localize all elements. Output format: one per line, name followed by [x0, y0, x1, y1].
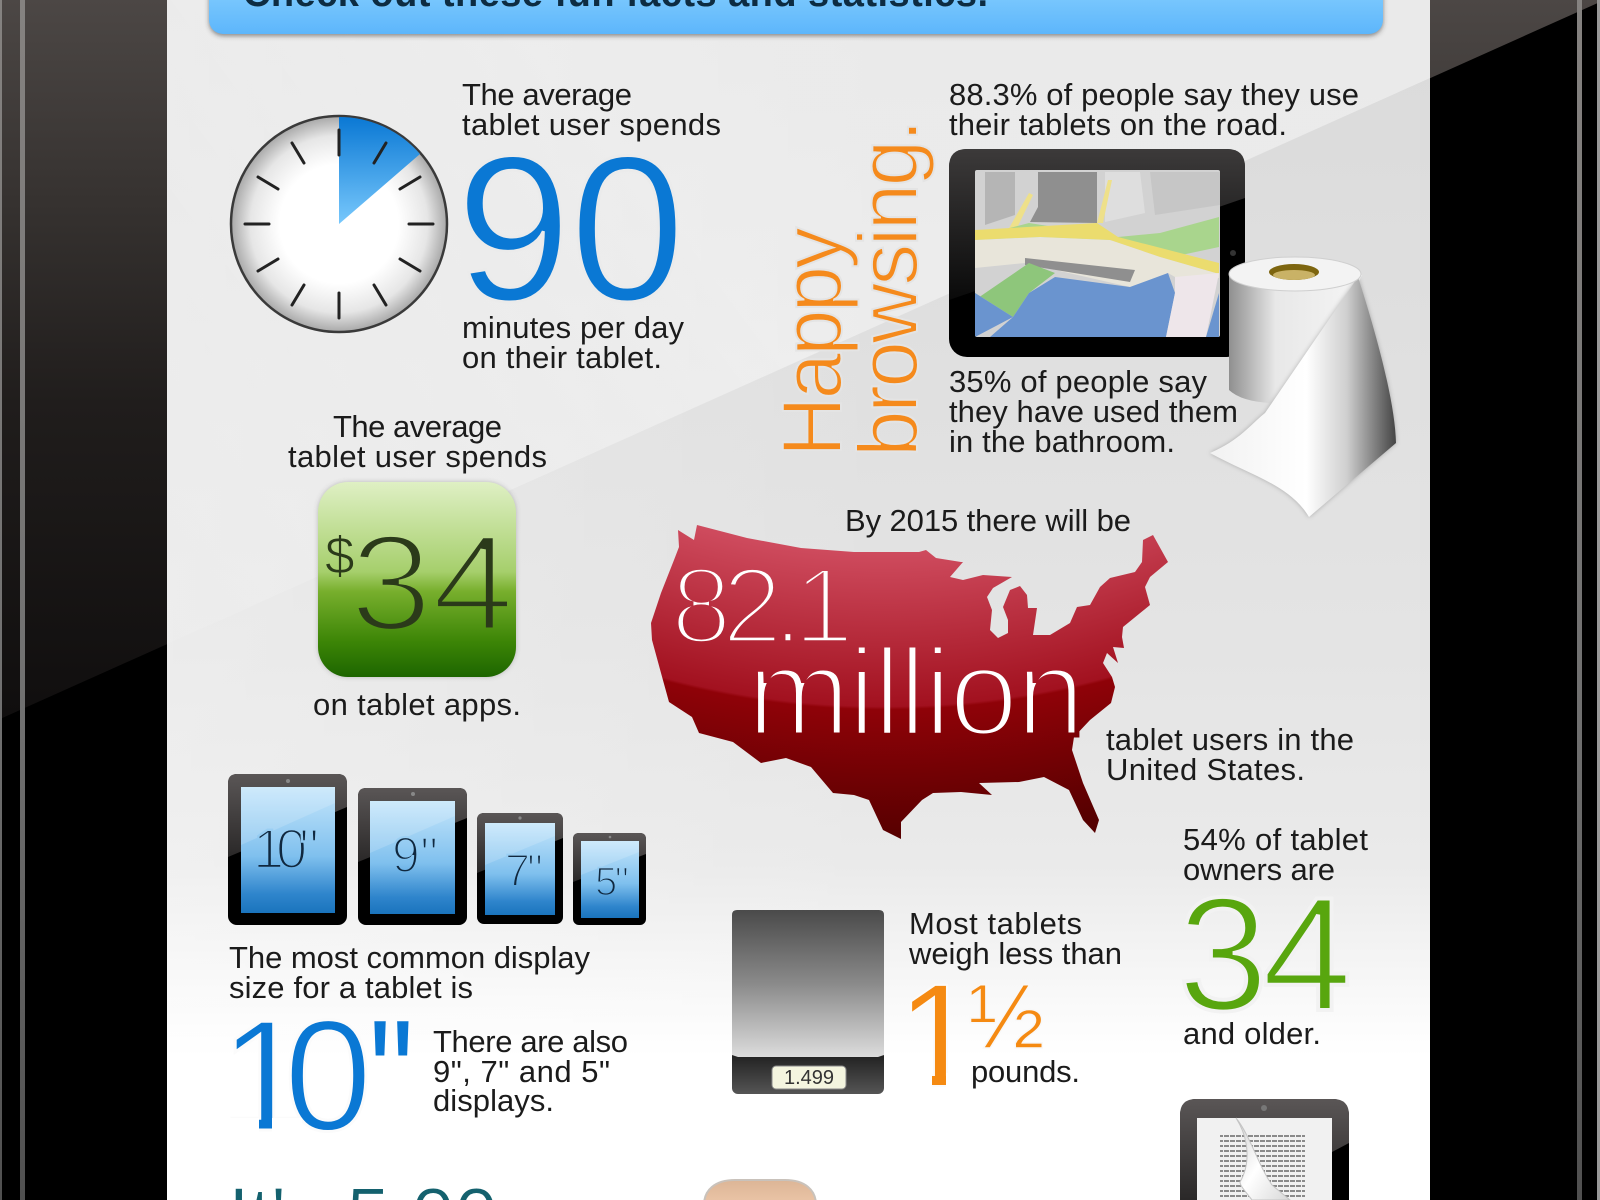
stat: 82.1 million US tablet users: tablet users in the: [1106, 722, 1354, 757]
screen panel background: [167, 0, 1430, 1200]
stat: used in the bathroom: 35% of people say: [949, 364, 1208, 399]
stat: most common display size: ": [369, 988, 414, 1164]
icon: weighing scale: [732, 910, 884, 1094]
stat: 54 percent are 34 and older: and older.: [1183, 1016, 1321, 1051]
tablet 10 inch: 10": [253, 817, 319, 880]
stat: 34 dollars on tablet apps: $: [325, 527, 354, 586]
stat: used in the bathroom: [949, 364, 1238, 459]
tablet 5 inch: [573, 833, 646, 925]
tablet 9 inch: 9": [392, 827, 438, 883]
map of the United States: [651, 525, 1168, 839]
stat: most common display size: displays.: [433, 1083, 554, 1118]
stat: weight under 1 and a half pounds: weigh less than: [908, 936, 1122, 971]
stat: 82.1 million US tablet users: United States.: [1106, 752, 1305, 787]
stat: 90 minutes per day: tablet user spends: [462, 107, 721, 142]
stat: 34 dollars on tablet apps: The average: [333, 409, 502, 444]
vertical heading: Happy browsing: [765, 119, 935, 457]
stat: 34 dollars on tablet apps: [288, 409, 547, 722]
icon: tablet with map: [949, 149, 1245, 357]
heading banner: [209, 0, 1383, 36]
stat: weight under 1 and a half pounds: ½: [968, 966, 1045, 1068]
stat: 82.1 million US tablet users: [651, 503, 1354, 839]
stat: used in the bathroom: in the bathroom.: [949, 424, 1175, 459]
stat: 34 dollars on tablet apps: on tablet apps.: [313, 687, 521, 722]
stat: 82.1 million US tablet users: million: [747, 624, 1085, 762]
stat: 54 percent are 34 and older: 54% of tablet: [1183, 822, 1368, 857]
stat: 90 minutes per day: [456, 77, 721, 375]
vertical heading: Happy browsing: browsing.: [841, 119, 935, 457]
stat: 82.1 million US tablet users: By 2015 there will be: [845, 503, 1131, 538]
stat: used on the road: 88.3% of people say they use: [949, 77, 1359, 112]
icon: toilet paper roll: [1210, 257, 1396, 517]
stat: most common display size: There are also: [433, 1024, 628, 1059]
clock icon: [231, 116, 447, 332]
stat: 54 percent are 34 and older: owners are: [1183, 852, 1335, 887]
icons: tablet display sizes: [228, 774, 646, 925]
icon: weighing scale: 1.499: [784, 1067, 834, 1089]
stat: most common display size: [218, 940, 628, 1164]
stat: weight under 1 and a half pounds: [897, 906, 1122, 1118]
vertical heading: Happy browsing: Happy: [765, 227, 859, 457]
tablet 7 inch: [477, 813, 563, 924]
stat: 54 percent are 34 and older: 34: [1178, 864, 1352, 1045]
stat: 90 minutes per day: The average: [462, 77, 632, 112]
stat: weight under 1 and a half pounds: 1: [897, 954, 979, 1118]
tablet 7 inch: 7": [505, 845, 543, 896]
tablet 10 inch: [228, 774, 347, 925]
stat: used on the road: [949, 77, 1359, 142]
stat: most common display size: size for a tablet is: [229, 970, 473, 1005]
stat: most common display size: 9", 7" and 5": [433, 1054, 610, 1089]
stat: most common display size: The most common display: [229, 940, 590, 975]
stat: 90 minutes per day: on their tablet.: [462, 340, 662, 375]
stat: weight under 1 and a half pounds: Most tablets: [909, 906, 1082, 941]
stat: most common display size: 10: [220, 988, 372, 1164]
tablet 9 inch: [358, 788, 467, 925]
icon: e-reader tablet: [1180, 1099, 1349, 1200]
stat: 82.1 million US tablet users: 82.1: [671, 545, 854, 667]
stat: used on the road: their tablets on the road.: [949, 107, 1287, 142]
stat: 34 dollars on tablet apps: 34: [350, 507, 514, 660]
stat: 90 minutes per day: minutes per day: [462, 310, 684, 345]
stat: 34 dollars on tablet apps: tablet user spends: [288, 439, 547, 474]
icon: fingertip: [704, 1180, 816, 1200]
stat: 90 minutes per day: 90: [456, 113, 685, 344]
stat: weight under 1 and a half pounds: pounds.: [971, 1054, 1080, 1089]
stat: used in the bathroom: they have used them: [949, 394, 1238, 429]
tablet 5 inch: 5": [595, 860, 629, 904]
